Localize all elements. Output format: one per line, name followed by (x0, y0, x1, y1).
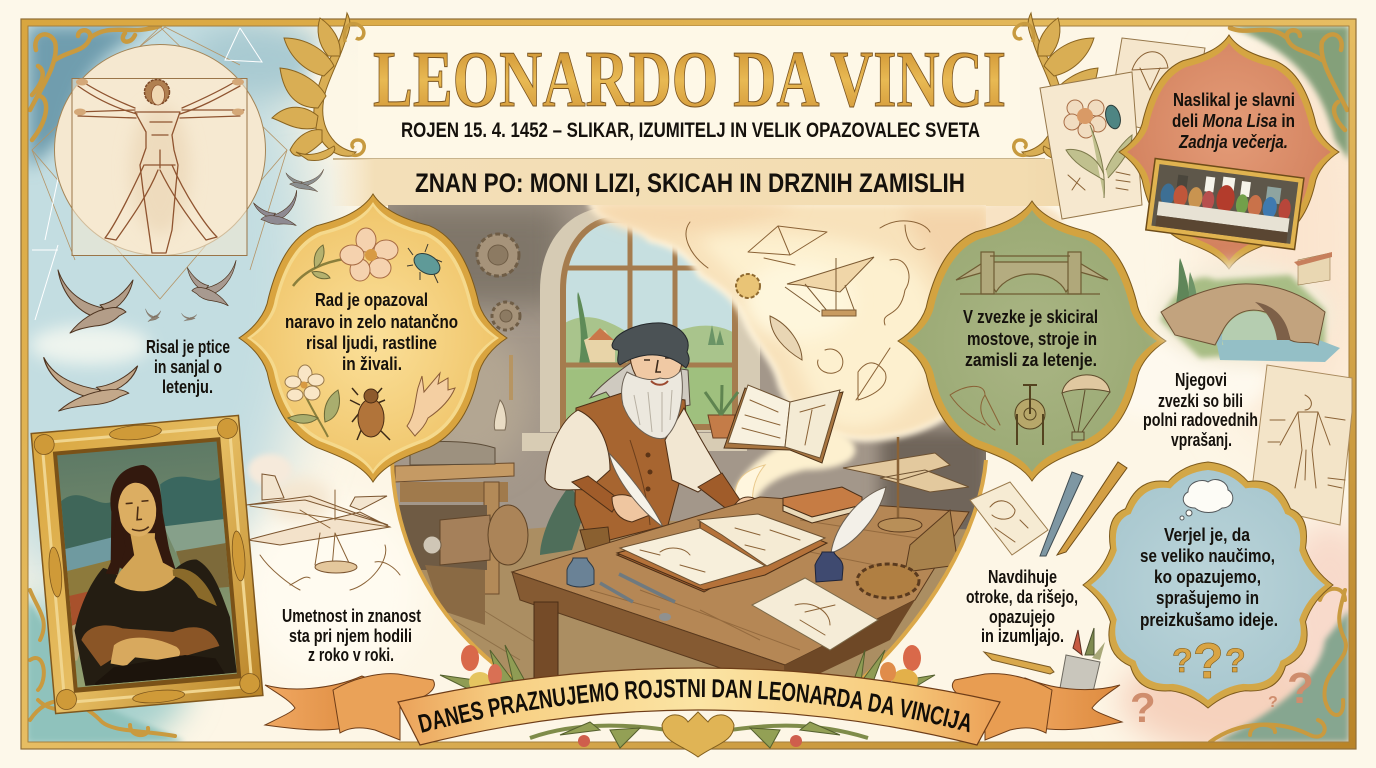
text: inspiration note: Navdihuje (988, 567, 1057, 587)
back workbench (395, 442, 528, 625)
text: belief note: Verjel je, da (1164, 525, 1251, 545)
text: art and science note (282, 606, 421, 665)
left forearm (572, 476, 620, 512)
bird small gray (252, 190, 303, 232)
flowers left of banner (440, 645, 530, 692)
text: nature note (285, 290, 458, 374)
corner ornament: bottom right (1210, 589, 1346, 742)
text: inspiration note: in izumljajo. (981, 626, 1064, 646)
yellow pencil (984, 652, 1054, 674)
decorative question marks: ? (1268, 694, 1278, 711)
tools on wall (509, 355, 513, 400)
text: sketchbook note: zamisli za letenje. (965, 350, 1097, 370)
main ribbon (398, 668, 1000, 745)
bird tiny right (182, 313, 197, 321)
floating sketches (686, 221, 930, 400)
text: sketchbook note (963, 307, 1098, 370)
small table machine (905, 510, 958, 572)
bird large (58, 270, 133, 333)
text: notebooks note: vprašanj. (1171, 430, 1232, 450)
subtitle: ROJEN 15. 4. 1452 – SLIKAR, IZUMITELJ IN VELIK OPAZOVALEC SVETA (401, 119, 980, 142)
inkwell left (567, 558, 594, 587)
floor (421, 520, 966, 679)
text: notebooks note (1143, 370, 1258, 450)
text: famous works note (1172, 90, 1295, 152)
text: inspiration note (966, 567, 1078, 646)
bird lower left (44, 358, 138, 411)
left sleeve (545, 410, 610, 490)
icon: teal beetle (407, 244, 444, 283)
text: nature note: naravo in zelo natančno (285, 312, 458, 332)
quill in inkwell (831, 487, 886, 553)
wall (388, 205, 986, 529)
Vitruvian man drawing (32, 27, 287, 320)
text: famous works note: Zadnja večerja. (1178, 132, 1288, 152)
leaf ornament left (272, 13, 364, 161)
icon: parachute (1062, 375, 1110, 440)
Leonardo (540, 323, 762, 565)
face (630, 355, 682, 379)
anatomy parchment (1250, 365, 1352, 525)
text: art and science note: z roko v roki. (308, 645, 394, 665)
right tail (1012, 678, 1122, 730)
text: inspiration note: opazujejo (989, 607, 1055, 627)
right sleeve (665, 408, 722, 492)
left hand (612, 495, 650, 522)
framed Mona Lisa (31, 415, 263, 714)
stack of books (783, 487, 862, 523)
flowers right of banner (850, 645, 935, 691)
text: belief note: sprašujemo in (1156, 588, 1259, 608)
banner ribbon (264, 667, 1124, 746)
open book on table (617, 514, 827, 592)
text: notebooks note: zvezki so bili (1158, 391, 1243, 411)
yellow panel (239, 194, 507, 482)
icon: pulley (1015, 385, 1045, 445)
icon: question marks: ? (1193, 633, 1224, 689)
decorative question marks: ? (1130, 684, 1156, 731)
text: nature note: in živali. (342, 354, 402, 374)
central workshop scene (385, 203, 990, 695)
corner ornament: top left (30, 26, 160, 140)
pencil cup (1060, 628, 1105, 692)
text: sketchbook note: mostove, stroje in (967, 329, 1097, 349)
text: art and science note: Umetnost in znanost (282, 606, 421, 626)
blue thought panel (1083, 462, 1333, 708)
head (74, 78, 244, 116)
belt pouch (579, 526, 610, 550)
magic cloud (590, 203, 990, 515)
parchment with flower and beetle (1040, 72, 1142, 219)
text: notebooks note: polni radovednih (1143, 410, 1258, 430)
icon: wing machine (950, 386, 1000, 430)
decorative question marks: ? (1287, 664, 1314, 713)
table (512, 497, 969, 692)
crossbow (856, 348, 890, 400)
laurel under banner (530, 712, 868, 757)
window sill (522, 433, 747, 451)
decorative question marks (1130, 664, 1314, 731)
title panel (333, 26, 1045, 159)
title band (330, 159, 1065, 206)
right forearm (698, 473, 740, 510)
pens on table (600, 574, 675, 602)
banner ribbon: DANES PRAZNUJEMO ROJSTNI DAN LEONARDA DA VINCIJA (418, 679, 970, 733)
cloak behind (540, 490, 581, 555)
hair back (588, 362, 690, 406)
text: birds note (146, 337, 230, 397)
icon: question marks: ? (1225, 642, 1246, 680)
body (575, 392, 688, 545)
beetle sketch paper (752, 578, 878, 650)
stone arch (1161, 284, 1325, 345)
potted plant (705, 385, 738, 438)
icon: brown beetle (350, 388, 390, 440)
text: belief note: preizkušamo ideje. (1140, 610, 1278, 630)
ornithopter (785, 257, 874, 316)
leaf ornament right (1014, 13, 1106, 161)
hat (612, 323, 689, 368)
icon: hand (407, 373, 455, 436)
text: birds note: Risal je ptice (146, 337, 230, 357)
quill (609, 453, 663, 527)
constellation and geometric lines (32, 27, 287, 320)
window (566, 223, 732, 424)
icon: stone bridge (956, 252, 1108, 294)
river bridge scene (1157, 252, 1340, 367)
sketch paper (970, 482, 1048, 555)
bird tiny left (146, 309, 161, 322)
Last Supper painting (1146, 159, 1304, 249)
brass gear (857, 564, 919, 598)
figure (76, 80, 244, 253)
feather (770, 316, 802, 360)
floating open book (724, 385, 843, 463)
inkwell right (815, 552, 843, 582)
text: art and science note: sta pri njem hodili (289, 626, 412, 646)
flying model (843, 437, 969, 532)
known for: ZNAN PO: MONI LIZI, SKICAH IN DRZNIH ZAMISLIH (415, 168, 965, 198)
pencil gray (1040, 472, 1083, 556)
icon: lower flower (285, 365, 339, 437)
icon: thought cloud (1180, 480, 1233, 520)
red panel (1119, 35, 1339, 269)
pen gold (1057, 462, 1127, 555)
text: belief note: se veliko naučimo, (1140, 546, 1275, 566)
beard (622, 370, 682, 439)
title: LEONARDO DA VINCI (373, 36, 1006, 124)
circle (54, 44, 266, 256)
parchment sketch with parachute (1108, 38, 1205, 140)
stones on table (659, 613, 671, 621)
stone arch around window (540, 207, 760, 432)
text: belief note (1140, 525, 1278, 630)
right hand (736, 496, 755, 504)
painting (57, 441, 237, 688)
text: birds note: in sanjal o (154, 357, 222, 377)
bird upper right (187, 260, 236, 306)
bird far gray (286, 170, 324, 192)
text: famous works note: deli Mona Lisa in (1172, 111, 1295, 131)
text: sketchbook note: V zvezke je skiciral (963, 307, 1098, 327)
icon: question marks (1172, 633, 1246, 689)
text: nature note: Rad je opazoval (315, 290, 428, 310)
scene border (392, 460, 986, 690)
text: famous works note: Naslikal je slavni (1173, 90, 1295, 110)
text: notebooks note: Njegovi (1175, 370, 1227, 390)
text: nature note: risal ljudi, rastline (306, 333, 437, 353)
kite (748, 226, 827, 265)
flying machine sketch (246, 454, 400, 590)
banner text (421, 697, 972, 733)
icon: question marks: ? (1172, 642, 1193, 680)
figure shading (130, 105, 190, 235)
frame carvings (33, 417, 261, 711)
wall gears (477, 234, 520, 330)
icon: flower and stem (293, 228, 398, 286)
text: inspiration note: otroke, da rišejo, (966, 587, 1078, 607)
text: belief note: ko opazujemo, (1154, 567, 1261, 587)
corner ornament: bottom left (30, 590, 175, 736)
left tail (265, 676, 372, 730)
birds (44, 170, 324, 411)
floating gear (736, 274, 760, 298)
green panel (898, 201, 1166, 481)
text: birds note: letenju. (162, 377, 213, 397)
curves (686, 221, 930, 373)
corner ornament: top right (1230, 28, 1347, 130)
gold frame (31, 415, 263, 714)
square (72, 78, 247, 256)
